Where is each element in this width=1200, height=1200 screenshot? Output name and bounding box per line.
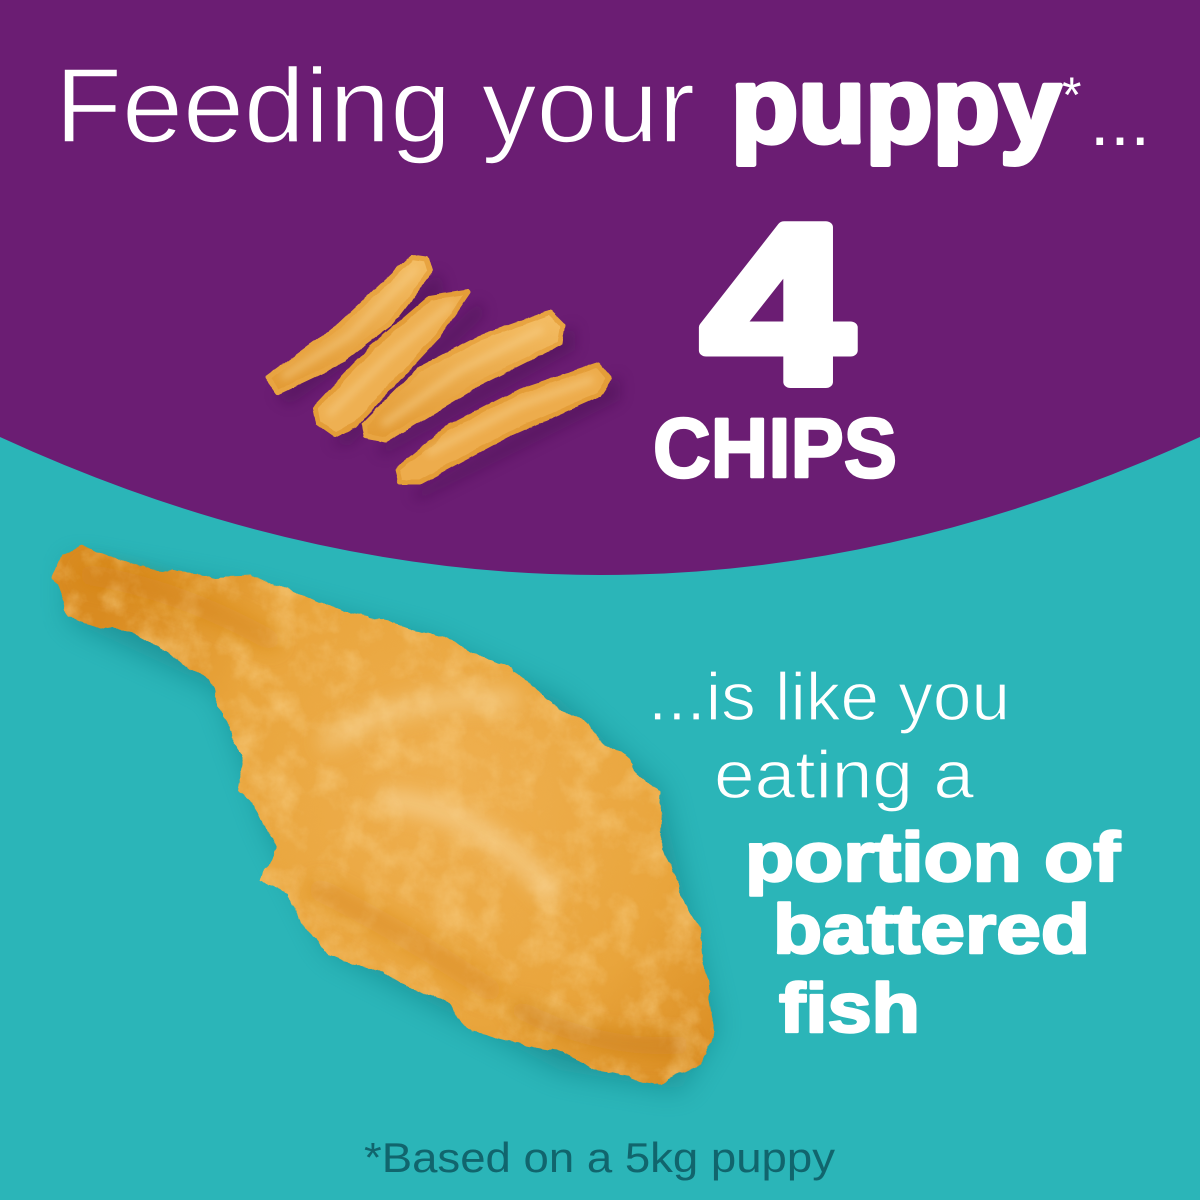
- text: is like you eating a portion of battered fish: [648, 659, 1121, 1047]
- chip 4: [397, 365, 609, 482]
- title: ...: [1090, 82, 1150, 160]
- chip 3: [364, 313, 563, 440]
- icon: battered fish: [52, 544, 715, 1090]
- chip 1: [268, 257, 430, 392]
- title: puppy: [731, 44, 1061, 165]
- title: [55, 44, 1150, 165]
- text: is like you eating a portion of battered fish: fish: [779, 969, 920, 1047]
- icon: four chips: [268, 257, 620, 500]
- text: is like you eating a portion of battered fish: eating a: [714, 737, 974, 813]
- title: Feeding your: [55, 47, 695, 165]
- text: is like you eating a portion of battered fish: battered: [773, 890, 1090, 968]
- footnote: *Based on a 5kg puppy: [364, 1134, 835, 1181]
- title: *: [1062, 67, 1081, 123]
- chip 2: [315, 292, 468, 435]
- text: is like you eating a portion of battered fish: portion of: [745, 818, 1121, 896]
- chips label: CHIPS: [653, 401, 897, 495]
- text: is like you eating a portion of battered fish: ...is like you: [648, 659, 1010, 735]
- purple curved header panel: [0, 0, 1200, 575]
- big number 4: 4: [702, 178, 852, 430]
